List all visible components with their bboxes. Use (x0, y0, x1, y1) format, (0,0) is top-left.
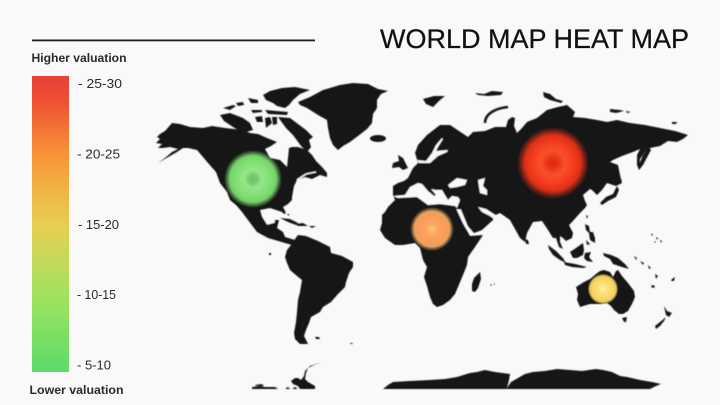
Iceland (370, 135, 386, 142)
Sri Lanka (525, 239, 529, 244)
Persian Gulf (478, 207, 497, 219)
New Siberian Islands (610, 109, 677, 124)
world map (156, 83, 688, 389)
heat spot: Australia, yellow (588, 274, 618, 304)
Galapagos and Falklands (269, 253, 353, 344)
Antarctic Peninsula (252, 362, 322, 389)
South America (285, 235, 353, 344)
Sulawesi (584, 252, 593, 262)
Arctic Canada islands (220, 87, 313, 152)
Sakhalin and Japan (600, 147, 651, 205)
New Guinea (603, 253, 651, 269)
Indian Ocean islands (490, 283, 495, 286)
Franz Josef Land (475, 91, 503, 96)
legend colour bar (32, 76, 69, 372)
Eurasia and Africa (380, 105, 688, 307)
legend tick labels: - 10-15 (77, 287, 116, 302)
North and Central America (156, 123, 327, 245)
legend tick labels: - 25-30 (78, 76, 122, 91)
legend (30, 51, 126, 397)
Madagascar (472, 272, 481, 292)
Hudson Strait and St Lawrence (297, 172, 316, 180)
legend tick labels: - 15-20 (78, 217, 119, 232)
legend tick labels: - 20-25 (77, 146, 120, 162)
Baltic Sea (417, 138, 448, 163)
Pacific islands (651, 234, 675, 288)
heat spot: North America, green (224, 150, 282, 208)
top rule (32, 40, 315, 41)
Black Sea (448, 178, 467, 188)
legend bottom label: Lower valuation (30, 383, 124, 397)
Novaya Zemlya (485, 107, 508, 123)
New Zealand (655, 306, 672, 329)
title: WORLD MAP HEAT MAP (380, 24, 689, 54)
Australia (576, 270, 635, 322)
Borneo (570, 243, 584, 258)
Caspian Sea (478, 178, 487, 195)
legend top label: Higher valuation (32, 51, 126, 65)
legend tick labels (77, 76, 122, 372)
Severnaya Zemlya (543, 92, 563, 103)
legend tick labels: - 5-10 (77, 358, 111, 372)
Baja California gulf (235, 207, 242, 217)
Antarctica (383, 369, 661, 389)
Sumatra and Java (548, 245, 587, 268)
Svalbard (423, 96, 445, 107)
Cuba and Caribbean (280, 214, 316, 228)
British Isles (392, 155, 408, 170)
Mediterranean Sea (393, 183, 460, 208)
Philippines, Taiwan and Hainan (566, 215, 595, 245)
heat spot: Russia, red (517, 127, 589, 199)
heat spot: Africa, orange (410, 207, 454, 251)
Greenland (298, 83, 388, 150)
